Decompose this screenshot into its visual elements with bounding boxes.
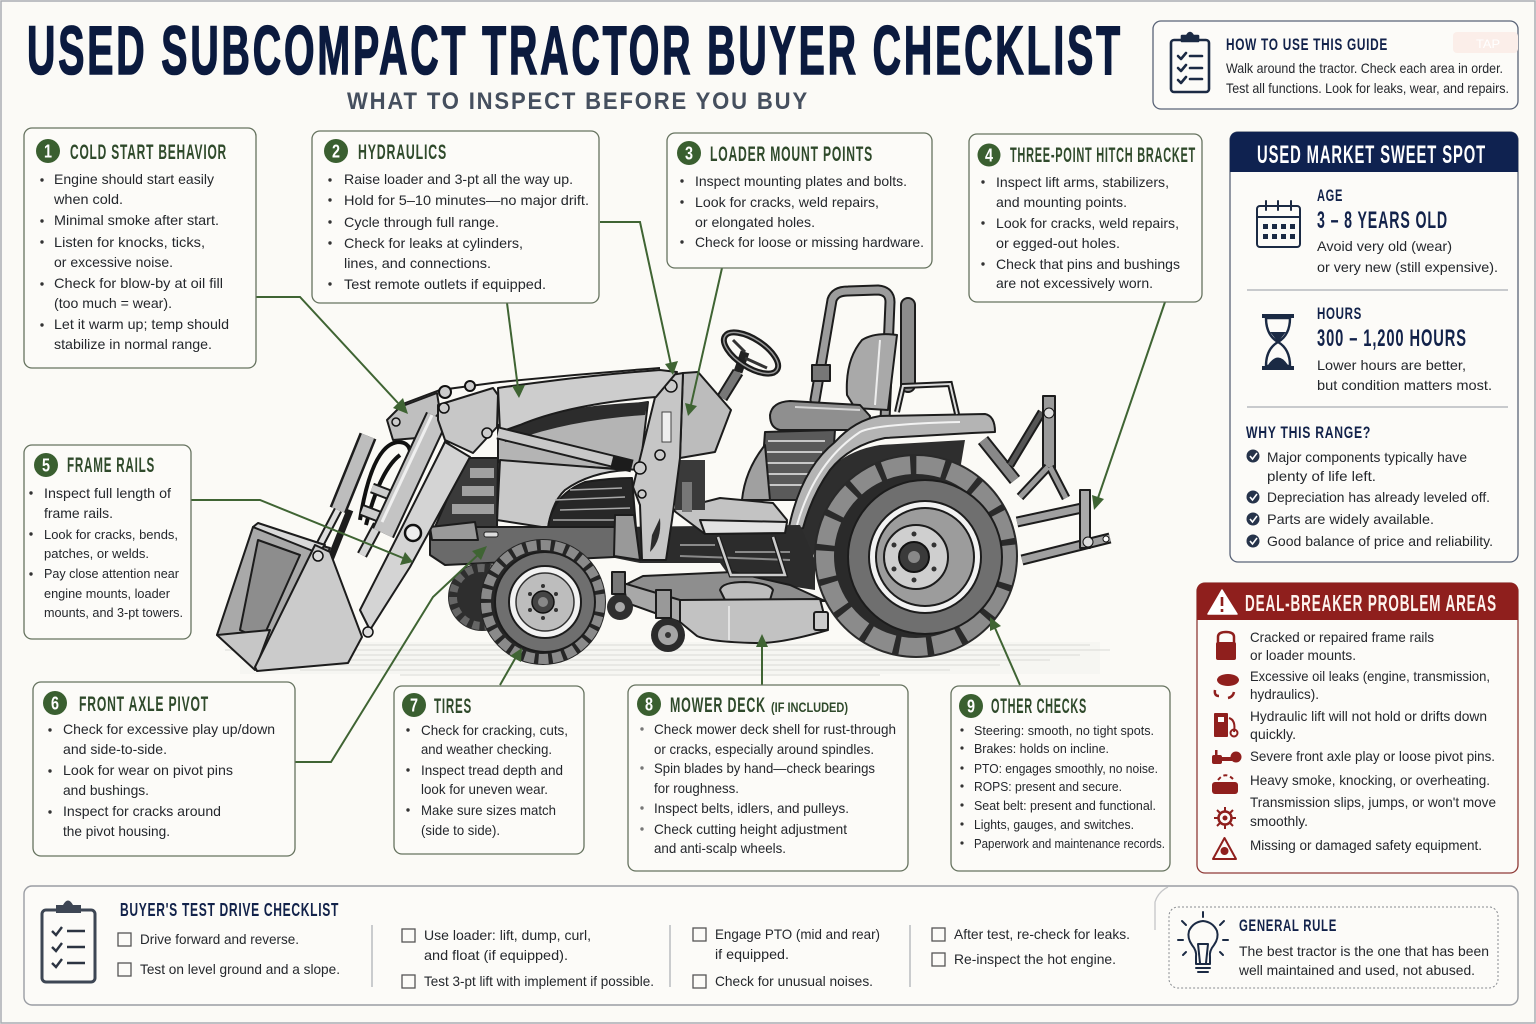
heading: TIRES [434,695,472,718]
number badge 2: 2 [332,142,340,162]
guide text: Walk around the tractor. Check each area in order. [1226,60,1503,76]
arrow: other checks [990,617,1020,685]
panel header [1230,132,1518,172]
lift cylinder [498,433,632,466]
bullet list: or cracks, especially around spindles. [654,741,874,757]
bullet list: Test remote outlets if equipped. [344,276,546,292]
rule text: well maintained and used, not abused. [1238,962,1475,978]
panel: used market sweet spot [1230,132,1518,562]
bullet list: Inspect full length of [44,485,171,501]
fender support dark area [790,440,965,560]
icon: hydraulic pump [1214,713,1238,737]
checklist column 4: After test, re-check for leaks. [954,926,1130,942]
arrow: three-point hitch bracket [1092,302,1165,510]
bullet list: Inspect mounting plates and bolts. [695,173,907,189]
number badge 3 [677,141,701,165]
heading: OTHER CHECKS [991,695,1087,718]
bullet list: Lights, gauges, and switches. [974,817,1134,832]
panel: front axle pivot [33,682,295,856]
bullet list: Look for cracks, weld repairs, [695,194,879,210]
hours range: but condition matters most. [1317,377,1492,393]
heading: MOWER DECK [670,694,766,717]
panel: how to use this guide [1153,21,1518,109]
bullet list: (too much = wear). [54,295,172,311]
age range [1317,186,1498,275]
bullet list: Check cutting height adjustment [654,821,847,837]
platform steps and support [718,537,785,575]
bullet list: Listen for knocks, ticks, [54,234,205,250]
icon: clipboard [42,900,95,982]
panel: mower deck [628,685,908,871]
front chassis rail [430,527,615,565]
bullet list: Inspect for cracks around [63,803,221,819]
rule text [1238,916,1489,978]
why this range list [1246,449,1493,549]
bullet list: when cold. [53,191,123,207]
why this range list: plenty of life left. [1267,468,1376,484]
faint tap chip [1453,32,1518,53]
icon: clipboard [1171,33,1209,92]
bullet list: Spin blades by hand—check bearings [654,760,875,776]
checklist column 3: Check for unusual noises. [715,973,873,989]
bullet list: Paperwork and maintenance records. [974,836,1165,851]
checklist column 2 [402,927,654,989]
number badge 6 [43,691,67,715]
bullet list: Pay close attention near [44,566,180,581]
why this range list: Depreciation has already leveled off. [1267,489,1490,505]
bullet list [40,171,229,352]
deal-breaker list [1250,629,1496,853]
bullet list: PTO: engages smoothly, no noise. [974,761,1158,776]
why this range list: Major components typically have [1267,449,1467,465]
bullet list: frame rails. [44,505,113,521]
bullet list: Inspect belts, idlers, and pulleys. [654,800,849,816]
bullet list: stabilize in normal range. [54,336,212,352]
bullet list: Inspect lift arms, stabilizers, [996,174,1169,190]
checklist column 1: Test on level ground and a slope. [140,961,340,977]
panel: other checks [951,686,1170,871]
age range: 3 – 8 YEARS OLD [1317,207,1448,234]
bullet list [406,722,568,838]
bullet list: Check for loose or missing hardware. [695,234,924,250]
number badge 4: 4 [985,146,993,166]
deal-breaker list: Hydraulic lift will not hold or drifts down [1250,708,1487,724]
heading: FRONT AXLE PIVOT [79,693,209,716]
heading: FRAME RAILS [67,454,155,477]
icon: oil leak [1215,674,1239,698]
heading note: (IF INCLUDED) [771,699,848,715]
rear frame rail and undercarriage [610,525,815,590]
deal-breaker list: Excessive oil leaks (engine, transmission, [1250,668,1490,684]
bullet list: Look for cracks, bends, [44,527,178,542]
loader front bars and cylinders [316,368,660,630]
bullet list: Look for wear on pivot pins [63,762,233,778]
icon: calendar [1257,201,1300,247]
panel: hydraulics [312,131,599,303]
three-point hitch [983,396,1110,560]
bullet list: lines, and connections. [344,255,491,271]
bullet list [981,174,1180,291]
bullet list: Check mower deck shell for rust-through [654,721,896,737]
bullet list: Look for cracks, weld repairs, [996,215,1179,231]
hood and engine [435,402,648,528]
icon: smoking vehicle [1212,775,1238,794]
bullet list: Seat belt: present and functional. [974,798,1156,813]
deal-breaker list: Severe front axle play or loose pivot pins. [1250,748,1495,764]
arrow: hydraulics to boom [507,303,525,398]
ROPS roll bar [815,290,908,420]
arrow: frame rails [191,500,413,565]
hours range: Lower hours are better, [1317,357,1466,373]
panel: tires [394,686,584,854]
engine stack under seat [760,430,835,500]
deal-breaker list: smoothly. [1250,813,1308,829]
heading: LOADER MOUNT POINTS [710,143,873,166]
number badge 1 [36,139,60,163]
panel: deal-breaker problem areas [1197,583,1518,873]
faint tap chip: TAP [1476,37,1500,51]
guide text: Test all functions. Look for leaks, wear, and repairs. [1226,80,1509,96]
bullet list: the pivot housing. [63,823,170,839]
panel: buyer's test drive checklist [24,886,1518,1005]
deal-breaker list: or loader mounts. [1250,647,1356,663]
bullet list: and side-to-side. [63,741,167,757]
bullet list [680,173,924,250]
why this range list: Good balance of price and reliability. [1267,533,1493,549]
arrow: mower deck [756,634,768,685]
number badge 9 [959,694,983,718]
bullet list: Raise loader and 3-pt all the way up. [344,171,573,187]
seat cushion [770,401,870,430]
bullet list: for roughness. [654,780,739,796]
age range: Avoid very old (wear) [1317,238,1452,254]
number badge 6: 6 [51,694,59,714]
bullet list [640,721,896,856]
hours range [1317,304,1492,393]
checklist column 3: if equipped. [715,946,789,962]
number badge 7 [402,693,426,717]
heading: THREE-POINT HITCH BRACKET [1010,144,1196,167]
deal-breaker list: Transmission slips, jumps, or won't move [1250,794,1496,810]
arrow: cold start to engine [256,297,408,414]
bullet list: or elongated holes. [695,214,815,230]
bullet list: Steering: smooth, no tight spots. [974,723,1154,738]
number badge 3: 3 [685,144,693,164]
deal-breaker list: hydraulics). [1250,686,1319,702]
upper loader boom [498,370,677,432]
illustration: used subcompact tractor with loader and mower deck [217,290,1110,675]
heading: HYDRAULICS [358,141,447,164]
checklist column 3 [693,926,880,989]
icon: hourglass [1262,316,1294,368]
bullet list: Hold for 5–10 minutes—no major drift. [344,192,589,208]
rule text: GENERAL RULE [1239,916,1337,935]
bullet list: and bushings. [63,782,149,798]
rear tire [814,454,1018,658]
number badge 7: 7 [410,696,418,716]
bullet list: Inspect tread depth and [421,762,563,778]
bucket [217,523,373,671]
checklist column 3: Engage PTO (mid and rear) [715,926,880,942]
checklist column 2: Use loader: lift, dump, curl, [424,927,591,943]
arrow: loader mount plate [685,268,722,416]
bullet list: Make sure sizes match [421,802,556,818]
number badge 4 [978,144,1000,166]
checklist column 4 [932,926,1130,967]
bullet list: patches, or welds. [44,546,149,561]
bullet list: or excessive noise. [54,254,173,270]
checklist column 1: Drive forward and reverse. [140,931,299,947]
bullet list [29,485,183,620]
bullet list [48,721,275,839]
bullet list: Check for blow-by at oil fill [54,275,223,291]
operator platform [673,498,787,534]
why this range list: Parts are widely available. [1267,511,1434,527]
panel: cold start behavior [24,128,256,368]
bullet list: Check for leaks at cylinders, [344,235,523,251]
arrow: loader mount to tower [600,222,678,375]
hours range: HOURS [1317,304,1362,323]
bullet list: Let it warm up; temp should [54,316,229,332]
rule text: The best tractor is the one that has been [1239,943,1489,959]
arrow: tires [500,648,522,685]
bullet list: Check that pins and bushings [996,256,1180,272]
checklist column 2: Test 3-pt lift with implement if possible. [424,973,654,989]
age range: AGE [1317,186,1343,205]
deal-breaker list: quickly. [1250,726,1296,742]
subtitle: WHAT TO INSPECT BEFORE YOU BUY [347,88,809,115]
arrow: front axle pivot [295,546,487,762]
loader tower plate [614,372,731,560]
checklist column 1 [118,931,340,977]
mower deck [607,572,828,652]
bullet list: Minimal smoke after start. [54,212,219,228]
icon: safety warning [1213,838,1236,859]
bullet list: and weather checking. [421,741,552,757]
checklist column 2: and float (if equipped). [424,947,568,963]
checklist column 4: Re-inspect the hot engine. [954,951,1116,967]
why this range heading: WHY THIS RANGE? [1246,423,1371,442]
number badge 5 [34,453,58,477]
heading: HOW TO USE THIS GUIDE [1226,35,1388,54]
rear front tire [448,563,516,631]
bullet list: engine mounts, loader [44,586,171,601]
panel: loader mount points [667,133,932,268]
bullet list: ROPS: present and secure. [974,779,1122,794]
bullet list: Cycle through full range. [344,214,499,230]
number badge 5: 5 [42,456,50,476]
grab handle [897,384,957,414]
panel: frame rails [24,445,191,639]
icon: light bulb [1178,912,1228,972]
bullet list: mounts, and 3-pt towers. [44,605,183,620]
bullet list: look for uneven wear. [421,781,548,797]
deal-breaker list: Cracked or repaired frame rails [1250,629,1434,645]
bullet list: or egged-out holes. [996,235,1120,251]
age range: or very new (still expensive). [1317,259,1498,275]
bullet list [328,171,589,292]
bullet list: Check for cracking, cuts, [421,722,568,738]
icon: cracked frame [1216,632,1236,660]
seat back [847,334,897,410]
callout: general rule [1169,907,1498,988]
heading: COLD START BEHAVIOR [70,141,227,164]
fender [788,414,995,532]
bullet list: (side to side). [421,822,500,838]
number badge 9: 9 [967,696,975,716]
bullet list: Engine should start easily [54,171,214,187]
heading: BUYER'S TEST DRIVE CHECKLIST [120,900,339,920]
bullet list: and anti-scalp wheels. [654,840,786,856]
panel header [1197,583,1518,620]
bullet list [960,723,1165,851]
icon: front axle [1212,750,1242,764]
number badge 8 [637,692,661,716]
bullet list: Brakes: holds on incline. [974,741,1109,756]
deal-breaker list: Missing or damaged safety equipment. [1250,837,1482,853]
bullet list: and mounting points. [996,194,1127,210]
number badge 2 [324,139,348,163]
front tire [480,539,606,665]
bullet list: are not excessively worn. [996,275,1153,291]
number badge 8: 8 [645,694,653,714]
icon: transmission gear [1214,807,1236,829]
bullet list: Check for excessive play up/down [63,721,275,737]
deal-breaker list: Heavy smoke, knocking, or overheating. [1250,772,1490,788]
number badge 1: 1 [44,142,52,162]
guide text [1226,60,1509,96]
steering wheel [717,324,785,398]
ground shadow [225,642,1110,675]
panel: three-point hitch bracket [969,134,1202,302]
